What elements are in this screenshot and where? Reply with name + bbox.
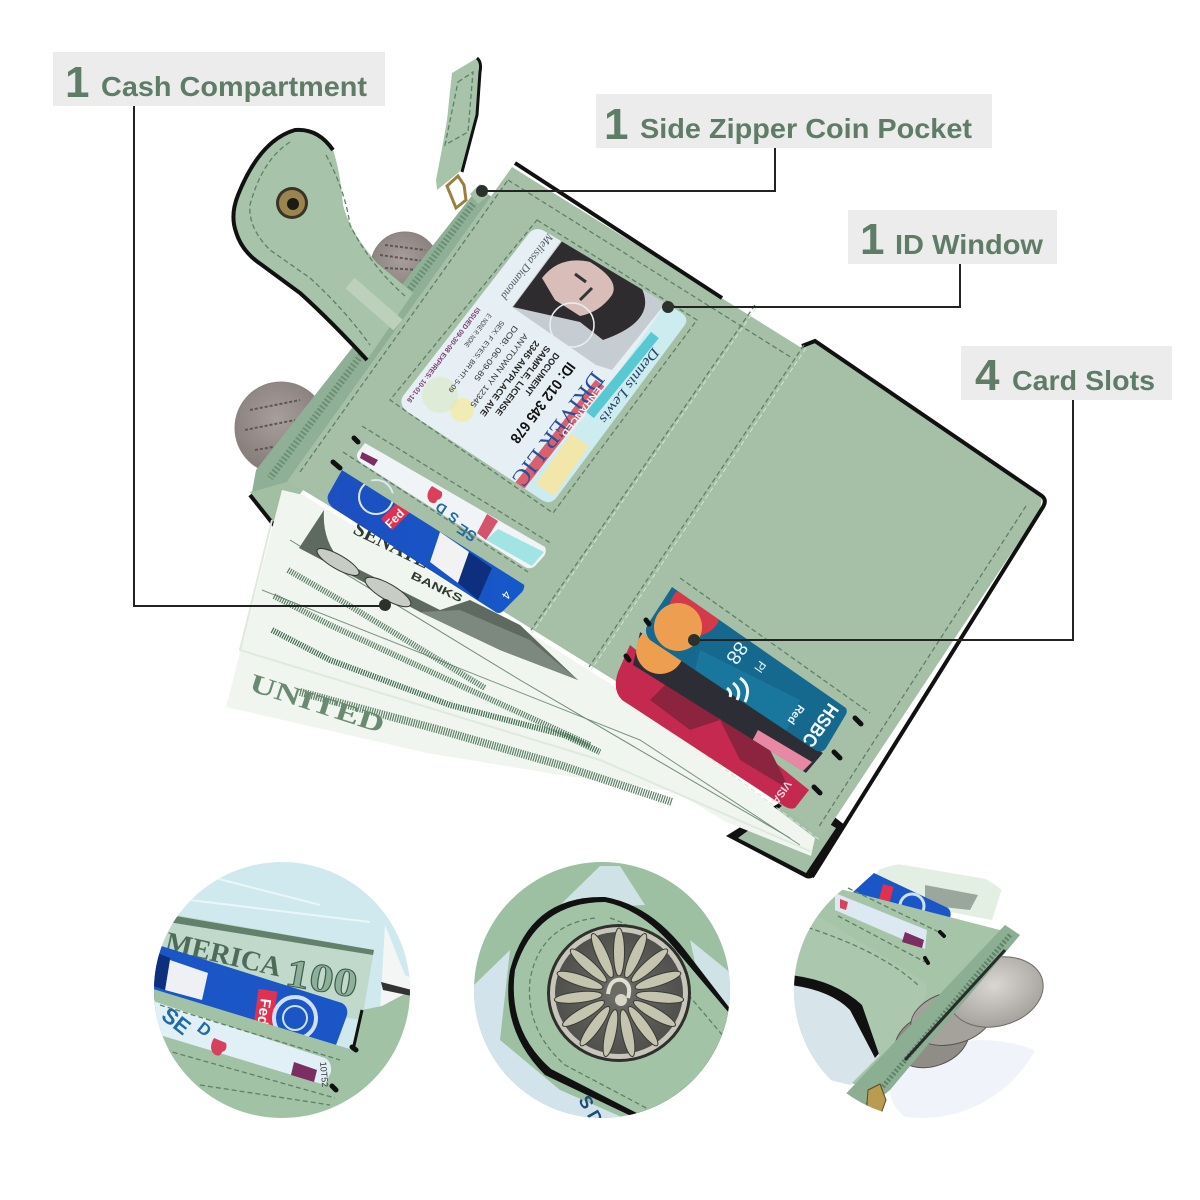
white card: S (445, 508, 462, 527)
coin: top (371, 232, 439, 300)
label: card slots: Card Slots (1012, 365, 1155, 396)
hsbc card: 88 (721, 637, 752, 668)
detail circle: flower button: S D (575, 1092, 607, 1128)
dollar bill (150, 913, 374, 1020)
id window: Melissa Diamond (498, 230, 556, 302)
label: id window (848, 210, 1057, 264)
detail circle: cash and cards (150, 860, 415, 1125)
id window: E: NONE R: NONE (462, 312, 492, 348)
zipper track (252, 184, 492, 492)
white card: 10T52 (318, 1061, 330, 1088)
zipper (846, 925, 1020, 1106)
dollar bill: 100 (282, 950, 361, 1006)
leader line: zipper pocket (476, 148, 775, 197)
id window (390, 220, 697, 513)
wallet photo illustration (226, 58, 1045, 878)
id window: 2345 ANYPLACE AVE (478, 339, 541, 418)
wallet corner near zipper (250, 476, 303, 529)
label: side zipper coin pocket (596, 94, 992, 149)
id window: DOB: 06-09-85 (472, 324, 520, 383)
leader line: id window (662, 264, 960, 313)
top and right black edges (515, 163, 1045, 877)
white card: D (194, 1018, 215, 1041)
icon: flower badge (547, 924, 691, 1062)
blue card (150, 944, 347, 1045)
bill top (876, 864, 1002, 920)
hsbc card (646, 584, 847, 752)
white card (150, 1000, 331, 1088)
label: cash compartment (53, 52, 385, 107)
dark card (633, 626, 823, 773)
label: id window: ID Window (895, 229, 1043, 260)
id window: ENHANCED (559, 385, 603, 439)
leader line: cash compartment (134, 106, 391, 611)
back layer of wallet (726, 790, 846, 878)
icon: zipper pull (866, 1083, 886, 1112)
blue card: 4 (499, 588, 514, 602)
id photo (512, 238, 668, 370)
white card: SE (157, 1002, 195, 1040)
blue card: Fed (382, 506, 407, 531)
icon: snap button (276, 187, 308, 219)
id window: ANYTOWN NY 12345 (468, 332, 530, 410)
icon: heart (427, 486, 442, 503)
id window: ISSUED 09-30-08 EXPIRES: 10-01-16 (405, 306, 481, 404)
right card stack: VISA (769, 778, 793, 806)
blue card: Fed (253, 997, 274, 1026)
id window: SEX: F EYES: BR HT: 5-09 (446, 319, 505, 393)
green pocket (150, 988, 412, 1125)
blue card (853, 873, 951, 918)
right card stack (616, 584, 861, 809)
id text: DRIVER LIC (506, 366, 609, 491)
tab strap with snap (233, 130, 413, 360)
hsbc card: Red (785, 702, 806, 726)
flap (508, 897, 735, 1125)
cash stack (226, 490, 815, 856)
white card: SE (454, 520, 480, 545)
top bill engraving (299, 510, 578, 680)
label: card slots: 4 (975, 351, 1000, 400)
label: cash compartment: 1 (65, 58, 89, 107)
label: card slots (961, 346, 1172, 400)
bill print strips (288, 570, 485, 688)
label: cash compartment: Cash Compartment (101, 71, 367, 102)
dollar bill: MERICA (162, 927, 285, 984)
id area and flap (790, 978, 880, 1085)
label: side zipper coin pocket: 1 (604, 100, 628, 149)
green panel (794, 890, 1000, 1084)
white card: D (432, 499, 450, 518)
stitching (300, 180, 1026, 828)
left card slots (328, 426, 552, 613)
coins (895, 956, 1044, 1068)
label: id window: 1 (860, 215, 884, 264)
wallet body (288, 167, 1042, 838)
label: side zipper coin pocket: Side Zipper Coin Pocket (640, 113, 972, 144)
id window corners (560, 866, 645, 906)
cash stack: BANKS (409, 570, 464, 605)
detail circle: coin pocket (794, 864, 1044, 1118)
hsbc card: HSBC (797, 699, 842, 751)
bill text: SENATE (350, 518, 433, 573)
hsbc card: Pl (751, 658, 769, 675)
white card (357, 443, 546, 568)
leader line: card slots (688, 400, 1073, 646)
red card (616, 645, 809, 809)
id window: Dennis Lewis (595, 344, 662, 426)
zipper pull (436, 58, 481, 208)
id window: DOCUMENT (522, 351, 561, 398)
id window: SAMPLE, LICENSE (493, 344, 552, 418)
blue card (328, 470, 524, 613)
detail circle: flower button (470, 860, 735, 1128)
cash stack: UNITED (246, 668, 388, 739)
green strip between cards (340, 462, 526, 586)
coin: lower (235, 382, 327, 474)
id window: ID: 012 345 678 (506, 359, 578, 446)
white card (835, 893, 927, 949)
